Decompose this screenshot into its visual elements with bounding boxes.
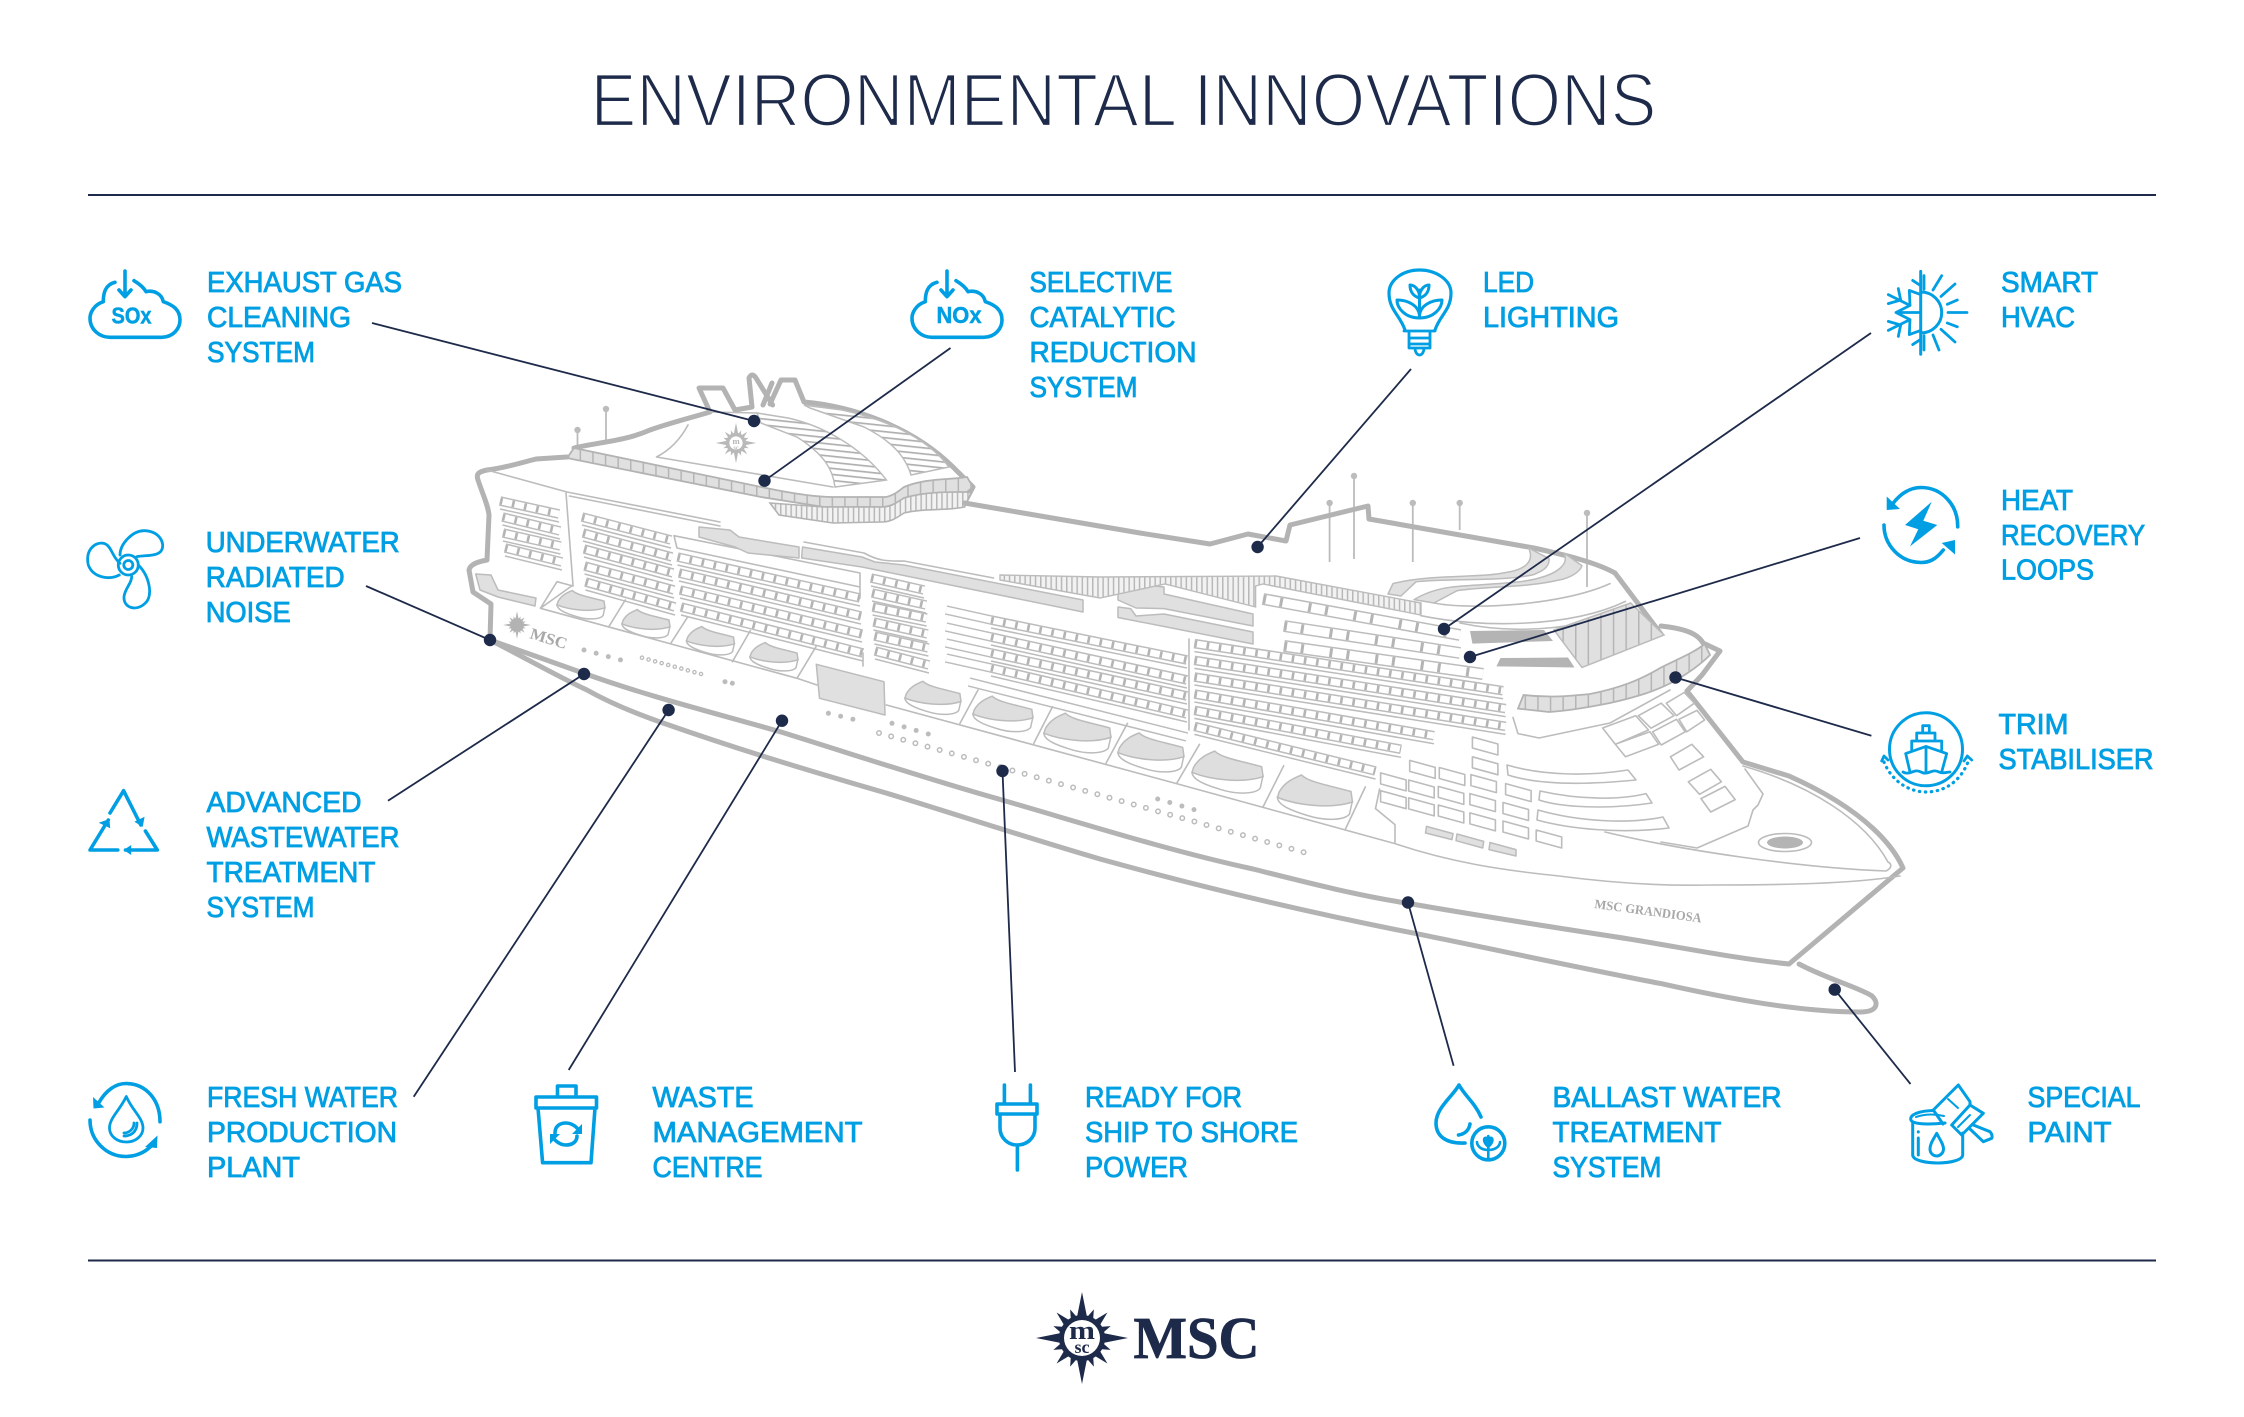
ship antennas: [574, 406, 1590, 587]
label: heat recovery loops: RECOVERY: [2001, 520, 2145, 552]
icon: LED bulb with plant: [1389, 270, 1451, 355]
icon: shore power plug: [997, 1085, 1037, 1170]
bridge windscreen: [1554, 603, 1664, 668]
label: ballast water treatment system: BALLAST WATER: [1552, 1082, 1782, 1114]
leader: special paint: [1828, 983, 1910, 1084]
label: ready for ship to shore power: READY FOR: [1085, 1082, 1242, 1114]
label: underwater radiated noise: UNDERWATER: [206, 527, 400, 559]
lifeboats: [557, 591, 1352, 819]
aft hull logo: [503, 611, 569, 653]
label: advanced wastewater treatment system: WASTEWATER: [206, 822, 400, 854]
leader: shore power: [996, 765, 1015, 1072]
bridge wing band: [1518, 644, 1710, 712]
anchor hatch oval: [1758, 834, 1812, 852]
icon: propeller: [88, 531, 163, 608]
label: waste management centre: MANAGEMENT: [652, 1117, 863, 1149]
label: selective catalytic reduction system: SYSTEM: [1030, 372, 1138, 404]
icon: ballast water drop: [1436, 1085, 1505, 1160]
label: heat recovery loops: HEAT: [2001, 485, 2073, 517]
label: waste management centre: WASTE: [652, 1082, 754, 1114]
icon: SOx cloud: SOx: [112, 302, 152, 328]
leader: underwater noise: [366, 586, 496, 646]
label: heat recovery loops: LOOPS: [2001, 554, 2094, 586]
side door panel: [816, 664, 885, 715]
title: ENVIRONMENTAL INNOVATIONS: [590, 59, 1656, 143]
MSC logo: MSC: [1134, 1305, 1260, 1371]
funnel star logo: [716, 423, 756, 463]
ship outer silhouette: [469, 457, 1903, 1012]
ship illustration: [469, 375, 1903, 1012]
MSC logo: m: [1069, 1316, 1095, 1345]
label: smart hvac: HVAC: [2001, 302, 2075, 334]
label: smart hvac: SMART: [2001, 267, 2098, 299]
label: fresh water production plant: PLANT: [207, 1152, 300, 1184]
label: ready for ship to shore power: SHIP TO SHORE: [1085, 1117, 1298, 1149]
label: ballast water treatment system: TREATMENT: [1552, 1117, 1722, 1149]
label: special paint: SPECIAL: [2028, 1082, 2140, 1114]
label: trim stabiliser: STABILISER: [1998, 744, 2154, 776]
bow deck lines: [1396, 766, 1900, 885]
leader: trim stabiliser: [1669, 671, 1871, 736]
label: selective catalytic reduction system: SELECTIVE: [1030, 267, 1172, 299]
grey front vents: [1426, 826, 1516, 856]
bridge front window panes: [1603, 692, 1735, 812]
icon: NOx cloud: [912, 271, 1002, 337]
icon: fresh water loop: [90, 1084, 160, 1156]
leader: waste management: [569, 714, 788, 1070]
window rows: [500, 501, 1506, 779]
label: selective catalytic reduction system: REDUCTION: [1030, 337, 1196, 369]
icon: snowflake and sun: [1888, 271, 1967, 354]
funnel dome: [567, 375, 973, 523]
leader: heat recovery: [1464, 538, 1860, 663]
label: ballast water treatment system: SYSTEM: [1552, 1152, 1662, 1184]
label: led lighting: LIGHTING: [1483, 302, 1619, 334]
label: exhaust gas cleaning system: CLEANING: [207, 302, 351, 334]
ship name: MSC GRANDIOSA: [1594, 896, 1703, 926]
funnel star logo: sc: [733, 446, 739, 452]
upper deck swooshes: [1388, 548, 1640, 629]
label: advanced wastewater treatment system: TREATMENT: [206, 857, 376, 889]
MSC logo: sc: [1074, 1337, 1090, 1357]
icon: heat recovery loops: [1884, 488, 1958, 562]
leader: ballast water: [1402, 896, 1454, 1066]
label: selective catalytic reduction system: CATALYTIC: [1030, 302, 1176, 334]
label: led lighting: LED: [1483, 267, 1534, 299]
aft hull logo: MSC: [528, 626, 569, 653]
label: ready for ship to shore power: POWER: [1085, 1152, 1188, 1184]
label: trim stabiliser: TRIM: [1998, 709, 2068, 741]
leader: wastewater: [388, 668, 590, 801]
leader: led lighting: [1251, 369, 1411, 553]
label: advanced wastewater treatment system: ADVANCED: [206, 787, 362, 819]
front small cabin windows: [1381, 737, 1562, 848]
icon: trim stabiliser ship: [1882, 713, 1972, 792]
dark deck blocks: [1470, 630, 1574, 668]
hull portholes: [584, 650, 1310, 854]
icon: recycle triangle: [90, 791, 157, 855]
leader: selective catalytic: [758, 348, 950, 487]
icon: SOx cloud: [90, 271, 180, 337]
leader: smart hvac: [1438, 333, 1871, 635]
aft small hull panel: [476, 574, 536, 606]
leader: exhaust gas: [372, 323, 760, 427]
label: special paint: PAINT: [2028, 1117, 2112, 1149]
label: underwater radiated noise: RADIATED: [206, 562, 345, 594]
leader: fresh water: [414, 704, 675, 1097]
label: waste management centre: CENTRE: [652, 1152, 762, 1184]
label: exhaust gas cleaning system: SYSTEM: [207, 337, 315, 369]
label: fresh water production plant: FRESH WATER: [207, 1082, 398, 1114]
icon: recycling bin: [536, 1086, 596, 1163]
label: advanced wastewater treatment system: SYSTEM: [206, 892, 314, 924]
MSC logo: [1036, 1292, 1260, 1384]
funnel star logo: m: [732, 436, 740, 446]
label: fresh water production plant: PRODUCTION: [207, 1117, 397, 1149]
long grey deck bands: [699, 527, 1253, 644]
label: underwater radiated noise: NOISE: [206, 597, 291, 629]
hatched upper deck strip: [1000, 575, 1421, 615]
icon: paint can and brush: [1911, 1085, 1992, 1163]
curved balconies: [1507, 765, 1669, 831]
icon: NOx cloud: NOx: [936, 302, 982, 328]
label: exhaust gas cleaning system: EXHAUST GAS: [207, 267, 402, 299]
deck lines and boat bay lines: [487, 470, 1670, 844]
